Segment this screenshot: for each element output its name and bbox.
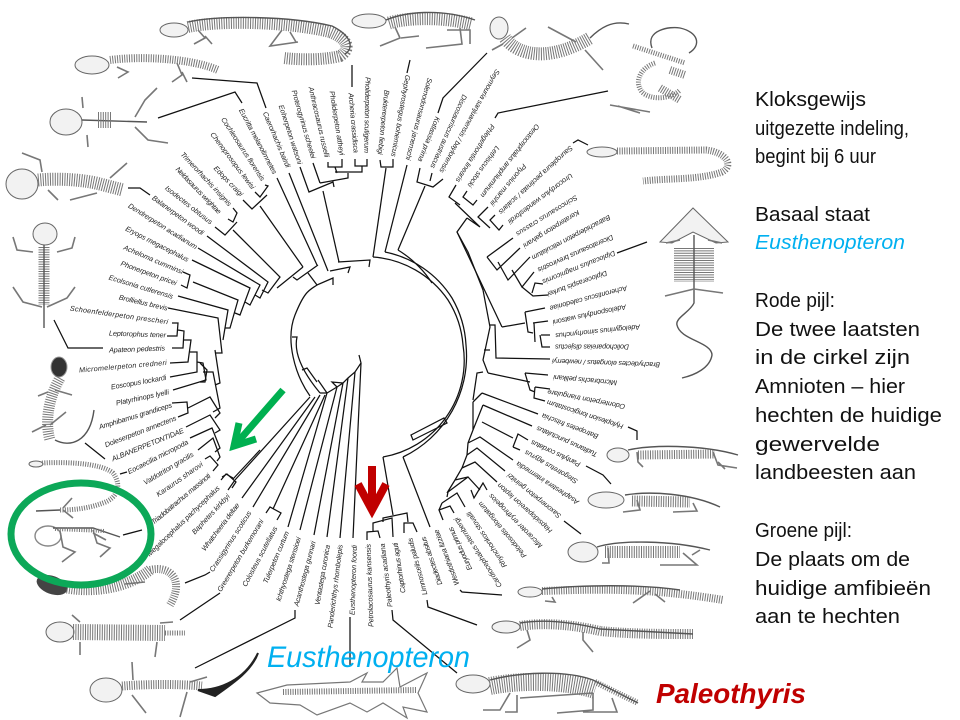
green circle highlighting specimen	[11, 483, 151, 585]
taxon labels: Acheloma cumminsi	[121, 242, 185, 276]
text block: basal state	[755, 204, 905, 254]
taxon labels: Ichthyostega stensioei	[274, 536, 303, 602]
taxon labels: Limnoscelis paludis	[405, 536, 429, 596]
taxon labels: Doleserpeton annectens	[103, 413, 178, 449]
taxon labels: Adelogyrinus simorhynchus	[555, 322, 641, 340]
taxon labels: Ventastega curonica	[313, 544, 332, 606]
taxon labels: Proterogyrinus scheelei	[290, 89, 318, 160]
taxon labels: Gephyrostegus bohemicus	[389, 74, 412, 158]
skeleton: dark-headed	[34, 569, 176, 605]
lower left ladder	[167, 323, 220, 412]
taxon labels: Triadobatrachus massinoti	[149, 471, 213, 526]
taxon labels: Urocordylus wandesfordii	[506, 171, 575, 226]
taxon labels: Oestocephalus amphiuminum	[478, 122, 542, 199]
taxon labels: Captorhinus aguti	[391, 542, 407, 594]
skeleton: top left long-tailed tetrapod	[160, 17, 350, 59]
taxon labels: Eoscopus lockardi	[110, 373, 167, 391]
taxon labels: Westlothiana lizziae	[432, 528, 461, 587]
text block: green arrow explanation: Groene pijl:	[755, 520, 852, 542]
big label Eusthenopteron: Eusthenopteron	[267, 641, 470, 674]
taxon labels: Edops craigi	[212, 164, 246, 198]
taxon labels: Karaurus sharovi	[154, 460, 205, 499]
text block: clockwise layout	[755, 89, 909, 168]
connector lines to skeletons	[54, 53, 647, 673]
upper left ladder	[168, 230, 280, 353]
taxon labels: Microbrachis pelikani	[552, 373, 617, 387]
skeleton: right lizard 1	[607, 446, 738, 469]
taxon labels: Brolliellus brevis	[118, 293, 169, 313]
taxon labels: Adelospondylus watsoni	[551, 302, 628, 327]
taxon labels: Sauropleura pectinata / scalaris	[496, 144, 575, 217]
taxon labels: Micraroter erythrogeios	[486, 491, 544, 550]
taxon labels: Tulerpeton curtum	[261, 530, 291, 585]
skeleton: long eel-like	[587, 147, 728, 181]
text block: clockwise layout: Kloksgewijs	[755, 89, 866, 111]
taxon labels: Pantylus cordatus	[529, 438, 582, 469]
taxon labels: Batrachiderpeton reticulatum	[530, 213, 612, 262]
taxon labels: Asaphestera intermedia	[514, 459, 581, 507]
taxon labels: Caerorhachis bairdi	[261, 110, 293, 169]
taxon labels: Colosteus scutellatus	[240, 524, 280, 588]
taxon labels: Chenoprosopus lewisi	[208, 130, 257, 191]
taxon labels: Valdotriton gracilis	[142, 450, 196, 487]
taxon labels: Lethiscus stocki	[465, 144, 502, 190]
red arrow	[358, 466, 386, 510]
skeleton: left vertical	[13, 223, 75, 328]
taxon labels: Dolichopareias disjectus	[555, 342, 629, 352]
taxon labels: Eucritta melanolimnetes	[237, 107, 279, 176]
taxon labels: Eusthenopteron foordi	[348, 544, 359, 615]
taxon labels: Phonerpeton pricei	[119, 259, 178, 288]
taxon labels: Apateon pedestris	[108, 344, 166, 355]
taxon labels: Solenodonsaurus janenschi	[404, 77, 434, 162]
taxon labels: Panderichthys rhombolepis	[326, 544, 345, 629]
taxon labels: Isodectes obtusus	[163, 183, 215, 227]
taxon labels	[69, 68, 660, 629]
taxon labels: Seymouria sanjuanensis / baylorensis	[437, 68, 502, 175]
taxon labels: Ecolsonia cutlerensis	[108, 273, 175, 301]
text block: red arrow explanation: Amnioten – hier	[755, 376, 905, 398]
taxon labels: Crassigyrinus scoticus	[207, 509, 254, 573]
skeleton: upper left body	[75, 56, 218, 82]
taxon labels: Brachydectes elongatus / newberryi	[552, 357, 660, 369]
text block: red arrow explanation: gewervelde	[755, 434, 880, 456]
skeleton: circled specimen	[35, 526, 120, 562]
skeleton: Diplocaulus	[660, 208, 728, 378]
taxon labels: Schoenfelderpeton prescheri	[69, 304, 169, 326]
taxon labels: Eoherpeton watsoni	[277, 104, 305, 166]
text block: red arrow explanation: in de cirkel zijn	[755, 347, 910, 369]
taxon labels: Eryops megacephalus	[124, 224, 191, 264]
skeleton: lower left with black tail	[90, 653, 258, 717]
big label Paleothyris: Paleothyris	[656, 678, 806, 709]
taxon labels: Acanthostega gunnari	[291, 540, 318, 608]
text block: red arrow explanation: landbeesten aan	[755, 462, 916, 484]
text block: basal state: Eusthenopteron	[755, 232, 905, 254]
taxon labels: Tuditanus punctulatus	[535, 424, 599, 459]
taxon labels: Phlegethontia linearis	[453, 123, 497, 185]
taxon labels: Paleothyris acadiana	[378, 543, 394, 608]
taxon labels: Bruktererpeton fiebigi	[376, 90, 391, 156]
taxon labels: Euryodus primus	[446, 525, 474, 572]
taxon labels: Petrolacosaurus kansensis	[364, 543, 375, 627]
skeleton: left wide head	[6, 153, 127, 200]
circular cladogram branches	[54, 53, 647, 673]
taxon labels: Hapsidopareion lepton	[495, 481, 554, 535]
taxon labels: Greererpeton burkemorani	[215, 517, 266, 593]
skeleton: long serpentine	[29, 461, 118, 518]
taxon labels: Hyloplesion longicostatum	[546, 398, 624, 431]
taxon labels: Cardiocephalus sternbergi	[451, 515, 504, 589]
taxon labels: Neldasaurus wrightae	[174, 165, 223, 216]
text block: clockwise layout: uitgezette indeling,	[755, 118, 909, 140]
taxon labels: Whatcheeria deltae	[199, 501, 241, 553]
taxon labels: Scincosaurus crassus	[514, 193, 579, 239]
text block: green arrow explanation	[755, 520, 931, 628]
skeleton: top salamander-like	[490, 17, 629, 70]
taxon labels: Diploceraspis burkei	[546, 269, 609, 299]
taxon labels: Kotlassia prima	[416, 115, 442, 163]
taxon labels: Dendrerpeton acadianum	[127, 201, 199, 251]
taxon labels: Megalocephalus pachycephalus	[145, 483, 222, 558]
skeleton: right lizard 3	[568, 542, 710, 565]
taxon labels: Amphibamus grandiceps	[97, 400, 173, 432]
skeleton: lizard with round skull	[32, 357, 94, 443]
text block: red arrow explanation: hechten de huidige	[755, 405, 942, 427]
taxon labels: Diplocaulus magnicornis	[541, 249, 617, 287]
text block: red arrow explanation	[755, 290, 942, 484]
taxon labels: Balanerpeton woodi	[150, 193, 206, 237]
taxon labels: Rhynchonkos stovalli	[464, 509, 509, 570]
taxon labels: Discosauriscus austriacus	[428, 93, 469, 170]
skeleton: Paleothyris	[456, 673, 638, 713]
taxon labels: Stegotretus agyrus	[522, 448, 579, 486]
taxon labels: Saxonerpeton geinitzi	[505, 471, 563, 520]
taxon labels: Cochleosaurus florensis	[219, 116, 267, 183]
text block: red arrow explanation: Rode pijl:	[755, 290, 835, 312]
taxon labels: Anthracosaurus russelli	[306, 85, 332, 159]
taxon labels: Platyrhinops lyelli	[115, 387, 170, 407]
taxon labels: Diceratosaurus brevirostris	[536, 233, 615, 275]
skeleton: upper left skull	[50, 88, 168, 147]
taxon labels: Acherontiscus caledoniae	[549, 283, 629, 313]
lower right ladder	[488, 373, 550, 401]
taxon labels: Pelodosotis elongatum	[476, 500, 528, 560]
text block: green arrow explanation: huidige amfibieën	[755, 578, 931, 600]
taxon labels: Baphetes kirkbyi	[190, 492, 232, 536]
text block: green arrow explanation: aan te hechten	[755, 606, 900, 628]
skeleton: right lizard 2	[588, 492, 720, 512]
skeleton: right lizard 4	[518, 586, 723, 603]
skeleton: Eusthenopteron fish	[257, 668, 427, 718]
skeleton: lower left wide body	[46, 615, 185, 657]
taxon labels: Pholiderpeton attheyi	[328, 90, 347, 156]
green arrow	[234, 390, 283, 446]
skeleton: coiled aistopod	[610, 28, 697, 113]
taxon labels: Keraterpeton galvani	[521, 208, 581, 250]
taxon labels: Eocaecilia micropoda	[126, 438, 190, 476]
skeleton: top centre	[352, 12, 475, 48]
taxon labels: Diadectes absitus	[419, 535, 444, 587]
text block: clockwise layout: begint bij 6 uur	[755, 146, 876, 168]
taxon labels: Pholiderpeton scutigerum	[362, 77, 372, 153]
taxon labels: Batropetes fritschia	[540, 411, 600, 441]
text block: basal state: Basaal staat	[755, 204, 870, 226]
taxon labels: Micromelerpeton credneri	[79, 358, 167, 374]
taxon labels: Leptorophus tener	[109, 329, 167, 340]
taxon labels: Odonterpeton triangulare	[547, 388, 626, 411]
taxon labels: Trimerorhachis insignis	[179, 150, 234, 208]
text block: green arrow explanation: De plaats om de	[755, 549, 910, 571]
skeleton: right lizard 5	[492, 621, 693, 652]
taxon labels: Ptyonius marshii	[488, 162, 528, 208]
upper right cluster	[449, 185, 503, 327]
text block: red arrow explanation: De twee laatsten	[755, 319, 920, 341]
taxon labels: Archeria crassidisca	[346, 92, 361, 153]
taxon labels: ALBANERPETONTIDAE	[109, 426, 185, 464]
